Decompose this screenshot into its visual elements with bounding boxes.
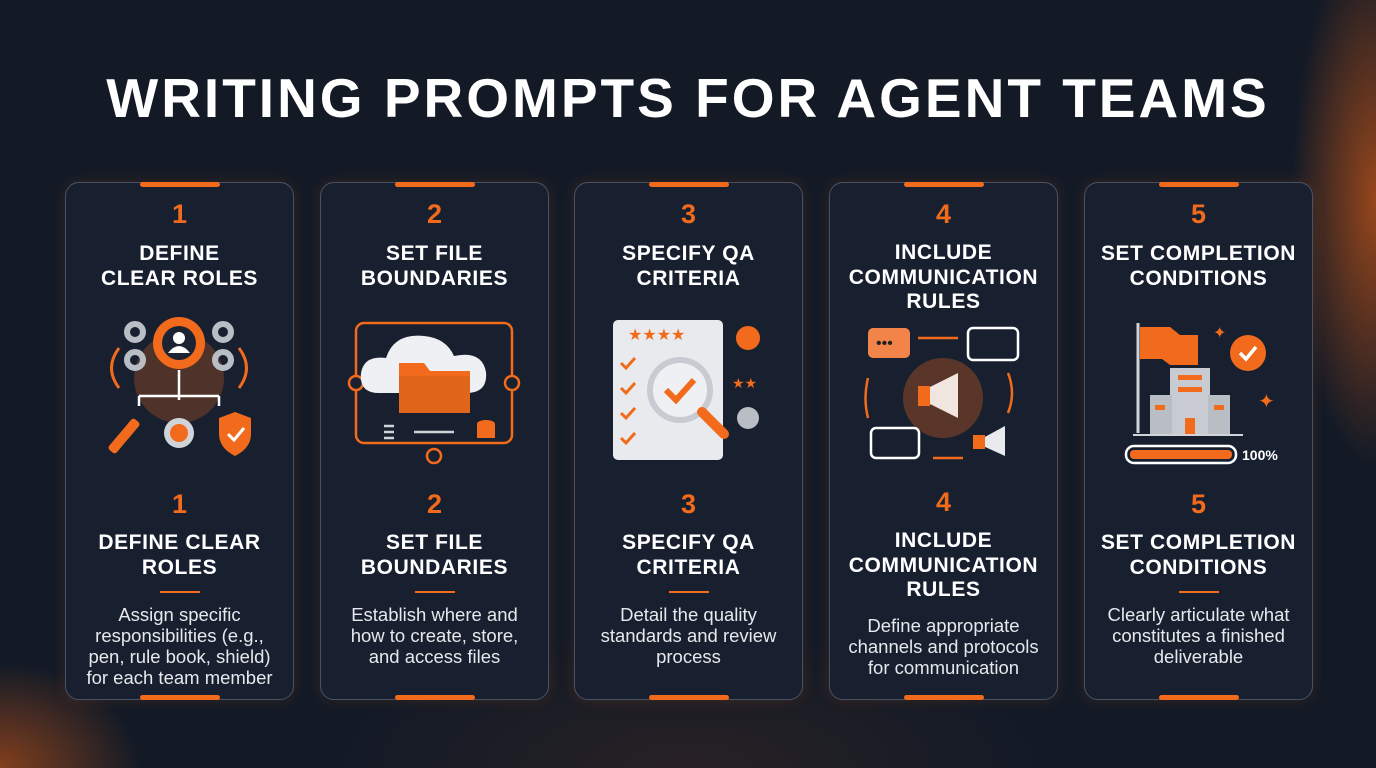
heading bottom — [98, 531, 261, 578]
icon: flag building progress: ✦ — [1213, 325, 1226, 342]
heading top: SET COMPLETION — [1101, 242, 1296, 265]
heading bottom: COMMUNICATION — [849, 554, 1038, 576]
description: how to create, store, — [351, 625, 518, 646]
description: pen, rule book, shield) — [88, 646, 271, 667]
heading top: BOUNDARIES — [361, 266, 508, 290]
description — [1108, 604, 1290, 667]
description: Assign specific — [118, 604, 241, 625]
heading top: SET FILE — [386, 242, 483, 265]
heading bottom: BOUNDARIES — [361, 556, 508, 578]
number 4 top: 4 — [936, 199, 951, 229]
panel: 3 specify qa criteria — [574, 182, 803, 700]
icon: checklist magnifier: ★★ — [732, 375, 757, 391]
number 5 bottom: 5 — [1191, 489, 1206, 519]
heading top — [1101, 242, 1296, 290]
description: and access files — [369, 646, 500, 667]
number 5 top: 5 — [1191, 199, 1206, 229]
description — [351, 604, 518, 667]
panel: 1 define clear roles — [65, 182, 294, 700]
heading bottom: SPECIFY QA — [622, 531, 755, 554]
description: Detail the quality — [620, 604, 757, 625]
description: channels and protocols — [848, 636, 1039, 657]
heading top: INCLUDE — [895, 241, 992, 264]
heading top: DEFINE — [139, 242, 220, 265]
icon: flag building progress: ✦ — [1258, 391, 1275, 413]
heading bottom: SET COMPLETION — [1101, 531, 1296, 554]
icon: checklist magnifier: ★★★★ — [628, 327, 685, 344]
description — [86, 604, 273, 688]
number 4 bottom: 4 — [936, 487, 951, 517]
number 2 top: 2 — [427, 199, 442, 229]
description: constitutes a finished — [1112, 625, 1285, 646]
panel: 2 set file boundaries — [320, 182, 549, 700]
panel: 4 include communication rules — [829, 182, 1058, 700]
number 3 top: 3 — [681, 199, 696, 229]
icon: flag building progress — [1124, 323, 1278, 464]
description: process — [656, 646, 721, 667]
heading top: CLEAR ROLES — [101, 266, 258, 290]
heading bottom — [849, 529, 1038, 601]
heading bottom — [1101, 531, 1296, 578]
description: responsibilities (e.g., — [95, 625, 264, 646]
description: standards and review — [601, 625, 776, 646]
description: deliverable — [1154, 646, 1243, 667]
heading bottom: INCLUDE — [895, 529, 992, 552]
description: for communication — [868, 657, 1019, 678]
heading bottom — [361, 531, 508, 578]
heading bottom: CRITERIA — [637, 556, 740, 578]
icon: flag building progress: 100% — [1242, 447, 1278, 463]
heading top — [849, 241, 1038, 313]
icon: megaphone chat: ••• — [876, 335, 893, 352]
heading top: COMMUNICATION — [849, 266, 1038, 288]
description: for each team member — [86, 667, 273, 688]
heading top — [361, 242, 508, 290]
number 2 bottom: 2 — [427, 489, 442, 519]
icon: gears roles — [108, 317, 251, 456]
description — [601, 604, 776, 667]
heading bottom: CONDITIONS — [1130, 556, 1267, 578]
description: Establish where and — [351, 604, 518, 625]
heading top — [101, 242, 258, 290]
heading bottom: ROLES — [142, 556, 217, 578]
description: Clearly articulate what — [1108, 604, 1290, 625]
heading bottom: RULES — [906, 578, 981, 601]
heading top: CRITERIA — [637, 266, 740, 290]
icon: megaphone chat — [864, 326, 1020, 460]
number 1 top: 1 — [172, 199, 187, 229]
description — [848, 615, 1039, 678]
heading bottom — [622, 531, 755, 578]
heading top: SPECIFY QA — [622, 242, 755, 265]
description: Define appropriate — [867, 615, 1020, 636]
icon: checklist magnifier — [613, 320, 760, 460]
heading top: CONDITIONS — [1130, 266, 1267, 290]
heading top: RULES — [906, 290, 981, 313]
panel: 5 set completion conditions — [1084, 182, 1313, 700]
title: WRITING PROMPTS FOR AGENT TEAMS — [106, 67, 1270, 129]
heading bottom: SET FILE — [386, 531, 483, 554]
heading bottom: DEFINE CLEAR — [98, 531, 261, 554]
number 3 bottom: 3 — [681, 489, 696, 519]
icon: cloud folder — [348, 322, 520, 464]
number 1 bottom: 1 — [172, 489, 187, 519]
heading top — [622, 242, 755, 290]
